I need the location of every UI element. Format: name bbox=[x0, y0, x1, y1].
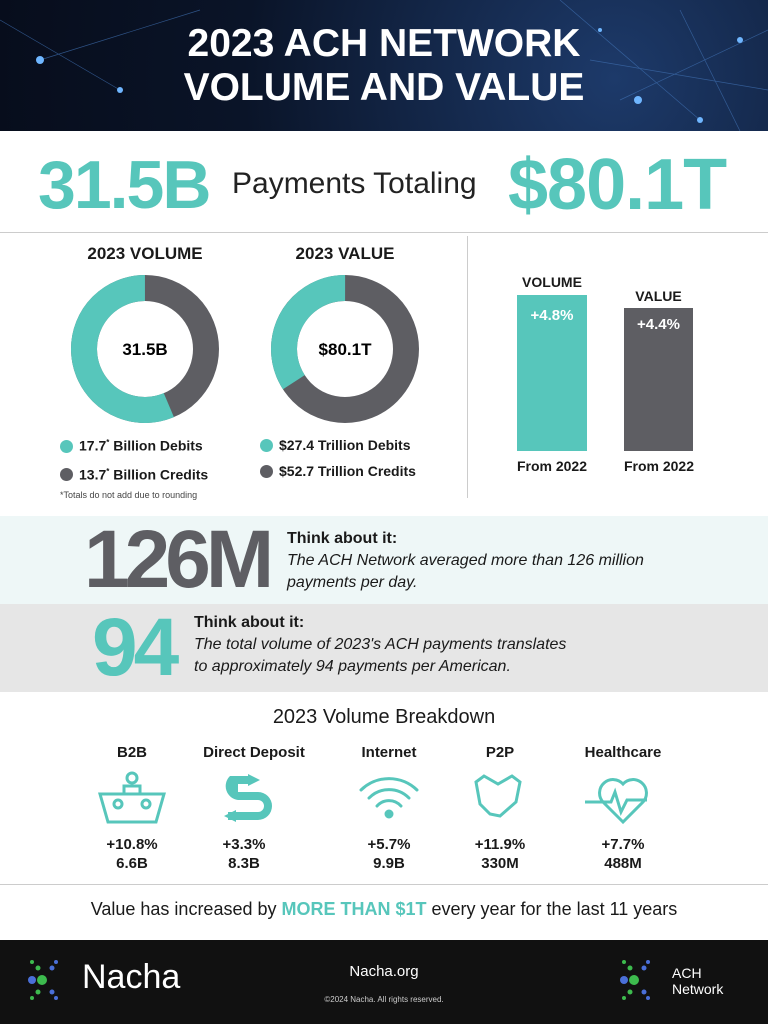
band: 126M: Think about it: bbox=[287, 530, 397, 547]
band: 94: to approximately 94 payments per American. bbox=[194, 658, 511, 675]
footer bbox=[0, 940, 768, 1024]
bar chart: growth: VALUE bbox=[635, 288, 682, 304]
band: 94: 94 bbox=[92, 602, 175, 693]
band: 94: Think about it: bbox=[194, 614, 304, 631]
volume breakdown bbox=[98, 706, 661, 872]
donut: volume: *Totals do not add due to rounding bbox=[60, 490, 197, 500]
volume breakdown: Healthcare bbox=[585, 744, 661, 761]
band: 94 bbox=[0, 604, 768, 692]
footer: ACH bbox=[672, 965, 702, 981]
band: 126M bbox=[0, 516, 768, 604]
donut: volume: 13.7* Billion Credits bbox=[79, 466, 208, 482]
band: 94: The total volume of 2023's ACH payments translates bbox=[194, 636, 566, 653]
bar chart: growth: From 2022 bbox=[624, 458, 694, 474]
volume breakdown: +5.7% bbox=[368, 836, 410, 853]
volume breakdown: 330M bbox=[481, 855, 519, 872]
headline stat bbox=[38, 145, 726, 225]
donut: value: 2023 VALUE bbox=[296, 244, 394, 263]
volume breakdown: +11.9% bbox=[475, 836, 525, 853]
volume breakdown: P2P bbox=[486, 744, 514, 761]
band: 126M: 126M bbox=[84, 514, 269, 605]
volume breakdown: +7.7% bbox=[602, 836, 644, 853]
band: 126M: payments per day. bbox=[287, 574, 417, 591]
header bbox=[0, 0, 768, 131]
volume breakdown: B2B bbox=[117, 744, 147, 761]
value statement: Value has increased by MORE THAN $1T every year for the last 11 years bbox=[91, 899, 677, 919]
title bbox=[184, 22, 584, 109]
donut: value bbox=[260, 244, 419, 479]
headline stat: $80.1T bbox=[508, 145, 726, 225]
volume breakdown: 488M bbox=[604, 855, 642, 872]
volume breakdown: 8.3B bbox=[228, 855, 260, 872]
donut: value: $52.7 Trillion Credits bbox=[279, 463, 416, 479]
band: 126M: The ACH Network averaged more than 126 million bbox=[287, 552, 644, 569]
bar chart: growth: +4.4% bbox=[637, 316, 680, 333]
volume breakdown: Internet bbox=[361, 744, 416, 761]
headline stat: Payments Totaling bbox=[232, 167, 477, 200]
footer: ©2024 Nacha. All rights reserved. bbox=[324, 995, 444, 1004]
volume breakdown: +10.8% bbox=[106, 836, 158, 853]
title: VOLUME AND VALUE bbox=[184, 66, 584, 109]
volume breakdown: Direct Deposit bbox=[203, 744, 305, 761]
donut: volume: 17.7* Billion Debits bbox=[79, 438, 203, 454]
bar chart: growth bbox=[517, 274, 694, 474]
footer: Nacha bbox=[82, 958, 180, 996]
donut: volume bbox=[60, 244, 219, 500]
donut: volume: 2023 VOLUME bbox=[87, 244, 203, 263]
volume breakdown: 6.6B bbox=[116, 855, 148, 872]
bar chart: growth: From 2022 bbox=[517, 458, 587, 474]
footer: Nacha.org bbox=[349, 963, 419, 980]
bar chart: growth: +4.8% bbox=[531, 307, 573, 324]
volume breakdown: 9.9B bbox=[373, 855, 405, 872]
donut: value: $27.4 Trillion Debits bbox=[279, 437, 410, 453]
headline stat: 31.5B bbox=[38, 147, 209, 223]
volume breakdown: 2023 Volume Breakdown bbox=[273, 706, 495, 728]
bar chart: growth: VOLUME bbox=[522, 274, 582, 290]
footer: Network bbox=[672, 981, 723, 997]
volume breakdown: +3.3% bbox=[223, 836, 265, 853]
donut: volume: 31.5B bbox=[122, 340, 168, 359]
donut: value: $80.1T bbox=[319, 340, 372, 359]
title: 2023 ACH NETWORK bbox=[188, 22, 580, 65]
